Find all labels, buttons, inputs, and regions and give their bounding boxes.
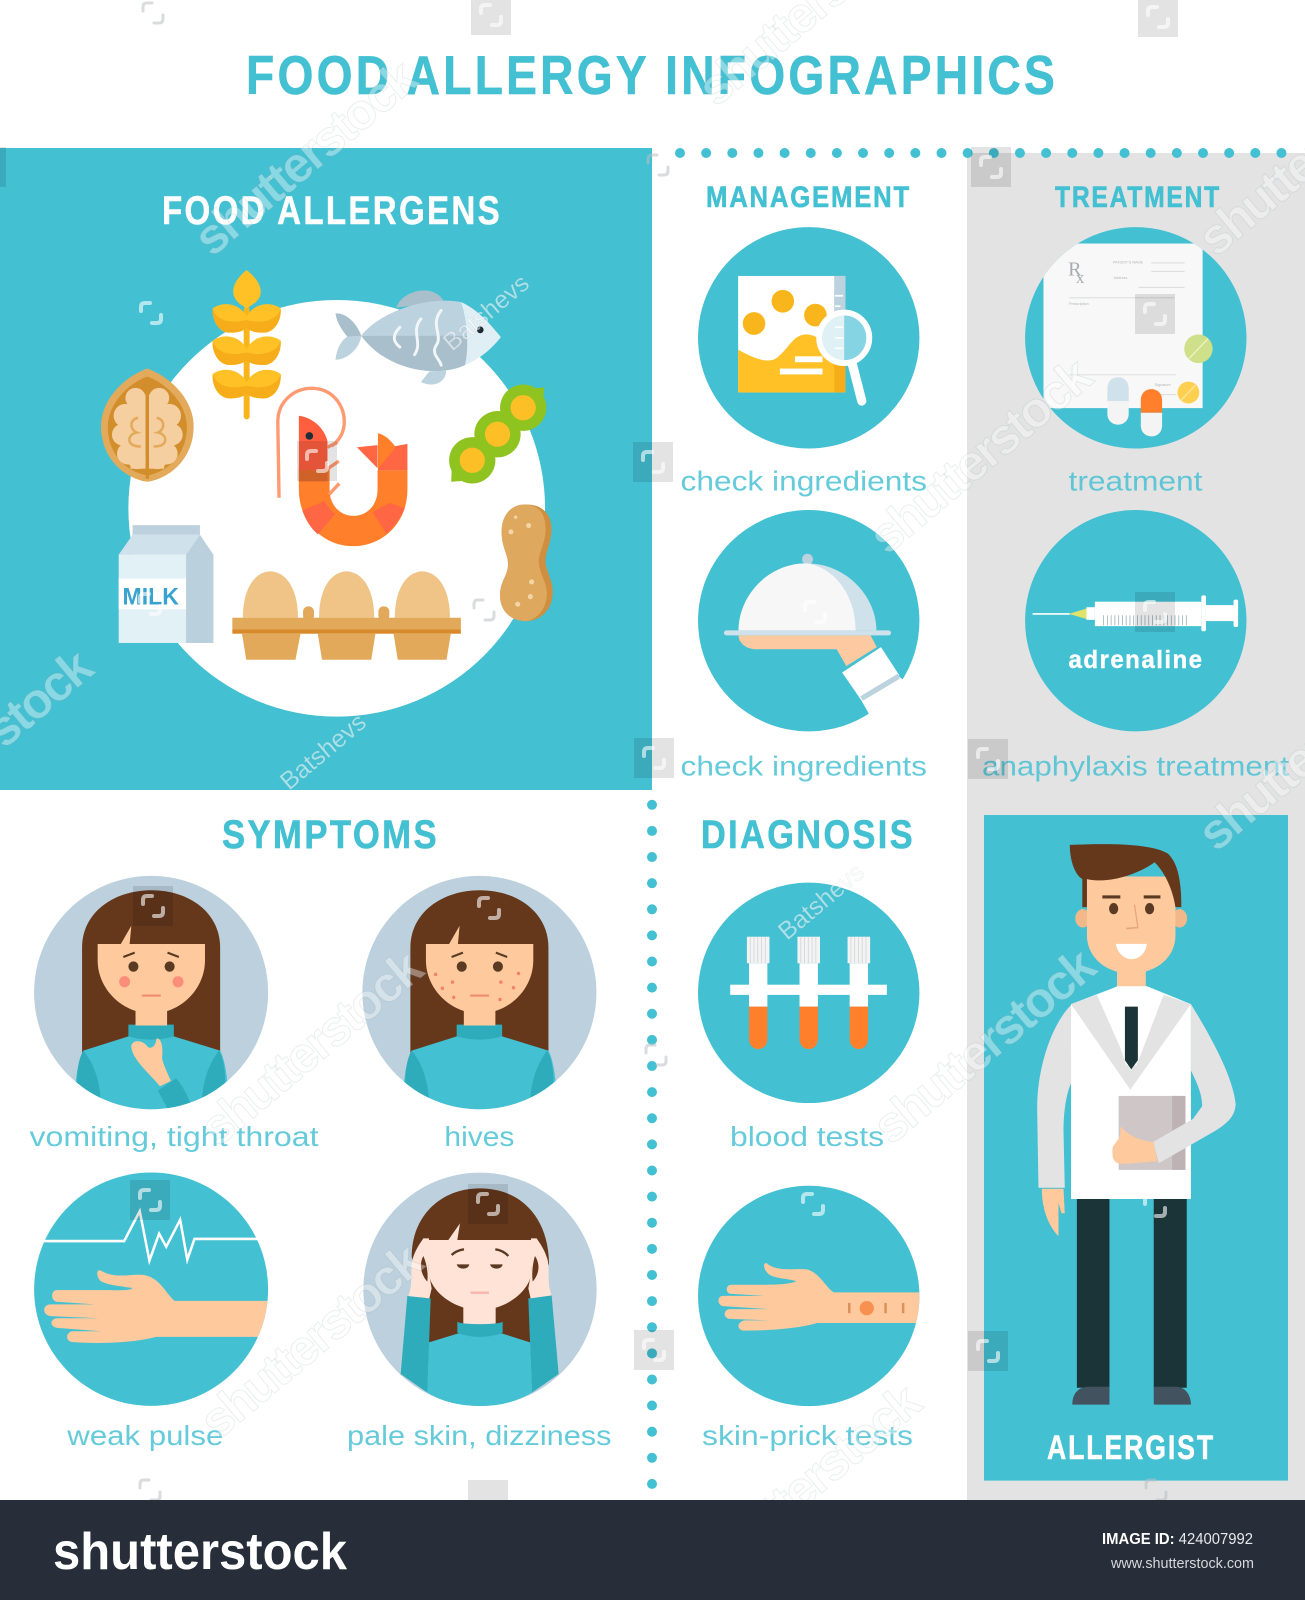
watermark marks on colour [140, 5, 1168, 1361]
heading: treatment: TREATMENT [1055, 181, 1221, 214]
watermark text: Batshevs [773, 858, 870, 946]
website url: www.shutterstock.com [1110, 1555, 1254, 1572]
label: adrenaline: adrenaline [1068, 646, 1204, 674]
icon: prescription and pills: Prescription [1069, 302, 1089, 306]
label: weak pulse: weak pulse [66, 1420, 223, 1451]
management and treatment icons [698, 227, 1246, 731]
icon: prescription and pills: PATIENT'S NAME [1113, 261, 1144, 265]
icon: check ingredients label [698, 227, 919, 449]
watermark text: Batshevs [438, 269, 535, 357]
icon: walnut [101, 369, 194, 482]
label: vomiting, tight throat: vomiting, tight throat [30, 1121, 319, 1152]
vertical dotted divider [647, 805, 657, 1490]
icon: prescription and pills [1025, 227, 1246, 449]
icon: girl with tight throat [34, 876, 268, 1112]
icon: blood test tubes [698, 883, 919, 1103]
footer bar [0, 1500, 1305, 1600]
icon: skin prick test on arm [698, 1186, 922, 1406]
label: check ingredients: check ingredients [680, 466, 927, 497]
icon: prescription and pills: x [1076, 268, 1085, 287]
symptom icons [34, 876, 596, 1406]
icon: prescription and pills: R [1068, 258, 1082, 281]
label: skin-prick tests: skin-prick tests [702, 1420, 913, 1451]
icon: peanut [500, 504, 553, 621]
title: FOOD ALLERGY INFOGRAPHICS [246, 44, 1058, 106]
shutterstock logo: shutterstock [53, 1523, 347, 1581]
watermark text: shutterstock [687, 1373, 932, 1590]
icon: prescription and pills: Address [1114, 276, 1128, 280]
icon: pale dizzy girl [363, 1173, 597, 1406]
watermark marks on white [140, 3, 1166, 1500]
panel: allergist background [984, 815, 1288, 1481]
heading: management: MANAGEMENT [706, 181, 911, 214]
icon: girl with hives [362, 876, 596, 1112]
label: blood tests: blood tests [730, 1121, 884, 1152]
label: pale skin, dizziness: pale skin, dizziness [347, 1420, 612, 1451]
icon: prescription and pills: Signature [1155, 383, 1171, 387]
icon: fish [335, 291, 501, 385]
label: allergist: ALLERGIST [1047, 1429, 1215, 1467]
diagnosis icons and allergist [698, 844, 1236, 1406]
panel: treatment background [967, 153, 1305, 1500]
watermark text: shutterstock [858, 347, 1103, 564]
heading: symptoms: SYMPTOMS [222, 813, 439, 857]
icon: peas [449, 385, 546, 483]
illustration: allergist doctor [1037, 844, 1236, 1405]
white allergen circle [128, 300, 545, 717]
icon: adrenaline syringe [1025, 510, 1246, 731]
watermark text: shutterstock [189, 1232, 434, 1449]
label: anaphylaxis treatment: anaphylaxis treatment [982, 750, 1289, 782]
panel: food allergens background [0, 148, 652, 790]
icon: wheat [213, 270, 281, 419]
label: check ingredients second: check ingredients [680, 750, 927, 782]
icon: cloche on hand [698, 510, 922, 731]
icon: weak pulse on wrist [34, 1173, 269, 1406]
horizontal dotted divider [680, 148, 1290, 158]
heading: food allergens: FOOD ALLERGENS [162, 189, 502, 233]
allergen illustrations [101, 291, 553, 717]
icon: shrimp [278, 388, 407, 546]
watermark text: shutterstock [189, 939, 434, 1156]
icon: milk carton [119, 525, 213, 643]
label: hives: hives [444, 1121, 514, 1152]
icon: eggs in tray [232, 571, 461, 660]
icon: milk carton: MILK [122, 583, 180, 610]
watermark text: Batshevs [275, 708, 372, 796]
watermark text: shutterstock [862, 937, 1107, 1154]
heading: diagnosis: DIAGNOSIS [701, 813, 915, 857]
watermark text: shutterstock [183, 49, 428, 266]
image id: IMAGE ID: 424007992 [1102, 1531, 1253, 1548]
label: treatment: treatment [1068, 466, 1203, 497]
